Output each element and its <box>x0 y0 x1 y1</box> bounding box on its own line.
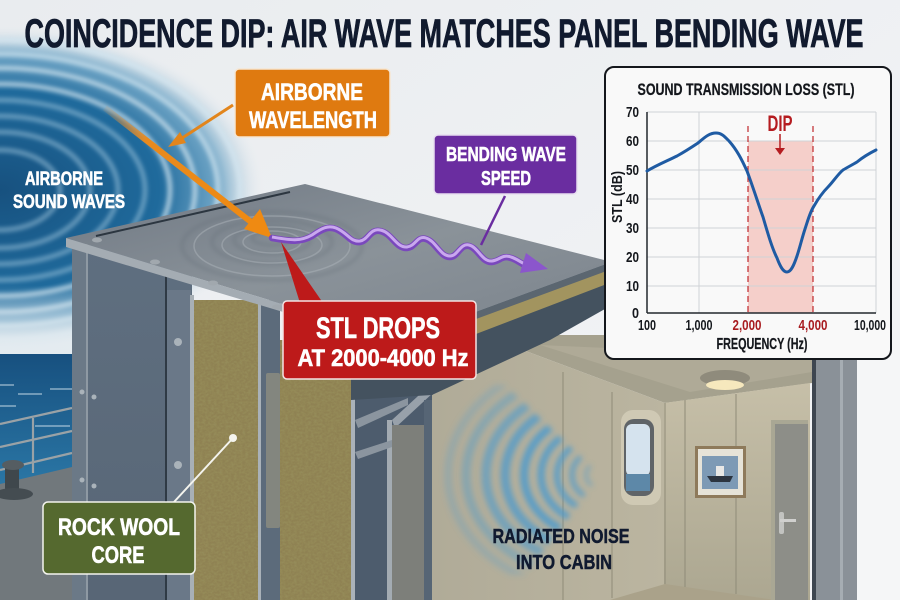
x axis labels: 4,000 <box>798 318 828 334</box>
arrow: bending wave <box>272 227 548 273</box>
y axis labels: 30 <box>626 220 639 237</box>
callout: rock wool core <box>43 434 237 574</box>
label: airborne sound waves: SOUND WAVES <box>13 192 125 213</box>
x axis labels: 10,000 <box>854 318 886 334</box>
steel frame beside cabin <box>351 340 434 600</box>
cabin interior <box>432 335 812 600</box>
x axis labels: 2,000 <box>732 318 762 334</box>
dip marker <box>768 111 792 155</box>
y axis labels: 70 <box>626 104 639 121</box>
x axis labels: 100 <box>638 318 656 334</box>
callout: STL drops: AT 2000-4000 Hz <box>298 345 468 372</box>
y axis labels <box>626 104 639 322</box>
y axis title: STL (dB) <box>609 171 626 223</box>
label: radiated noise into cabin: INTO CABIN <box>516 552 612 574</box>
y axis labels: 60 <box>626 133 639 150</box>
callout: airborne wavelength: WAVELENGTH <box>249 107 377 134</box>
callout: airborne wavelength: AIRBORNE <box>261 79 363 106</box>
panel: STL chart <box>605 67 891 359</box>
airborne sound waves <box>0 25 265 355</box>
framed ship picture <box>695 446 746 498</box>
right steel column <box>812 340 900 600</box>
sea and ship deck <box>0 354 75 600</box>
cabin window <box>621 410 661 505</box>
label: radiated noise into cabin: RADIATED NOISE <box>492 526 630 548</box>
arrow: incoming air wave <box>105 108 272 238</box>
x axis labels <box>638 318 886 334</box>
callout: STL drops: STL DROPS <box>316 312 440 345</box>
callout: bending wave speed: SPEED <box>481 168 531 190</box>
y axis labels: 50 <box>626 162 639 179</box>
y axis labels: 10 <box>626 278 639 295</box>
STL curve <box>647 133 876 272</box>
label: radiated noise into cabin <box>492 526 630 574</box>
callout: bending wave speed: BENDING WAVE <box>446 144 566 166</box>
y axis labels: 0 <box>632 305 639 322</box>
callout: rock wool core: ROCK WOOL <box>58 514 180 541</box>
label: airborne sound waves: AIRBORNE <box>25 169 103 190</box>
y axis labels: 20 <box>626 249 639 266</box>
label: airborne sound waves <box>13 169 125 213</box>
cabin door <box>771 420 808 600</box>
x axis labels: 1,000 <box>686 318 712 334</box>
rock wool core <box>194 300 351 600</box>
x axis title: FREQUENCY (Hz) <box>716 336 808 353</box>
callout: airborne wavelength <box>168 69 390 147</box>
y axis labels: 40 <box>626 191 639 208</box>
steel wall section <box>72 240 194 600</box>
radiated noise waves <box>443 384 594 576</box>
dip band <box>748 141 813 313</box>
callout: rock wool core: CORE <box>92 542 144 569</box>
steel roof panel <box>66 184 612 347</box>
callout: bending wave speed <box>434 135 577 245</box>
ceiling lamp <box>700 370 750 390</box>
dip marker: DIP <box>768 111 792 136</box>
roof beam and wool strip <box>351 262 612 400</box>
callout: STL drops <box>281 242 476 379</box>
